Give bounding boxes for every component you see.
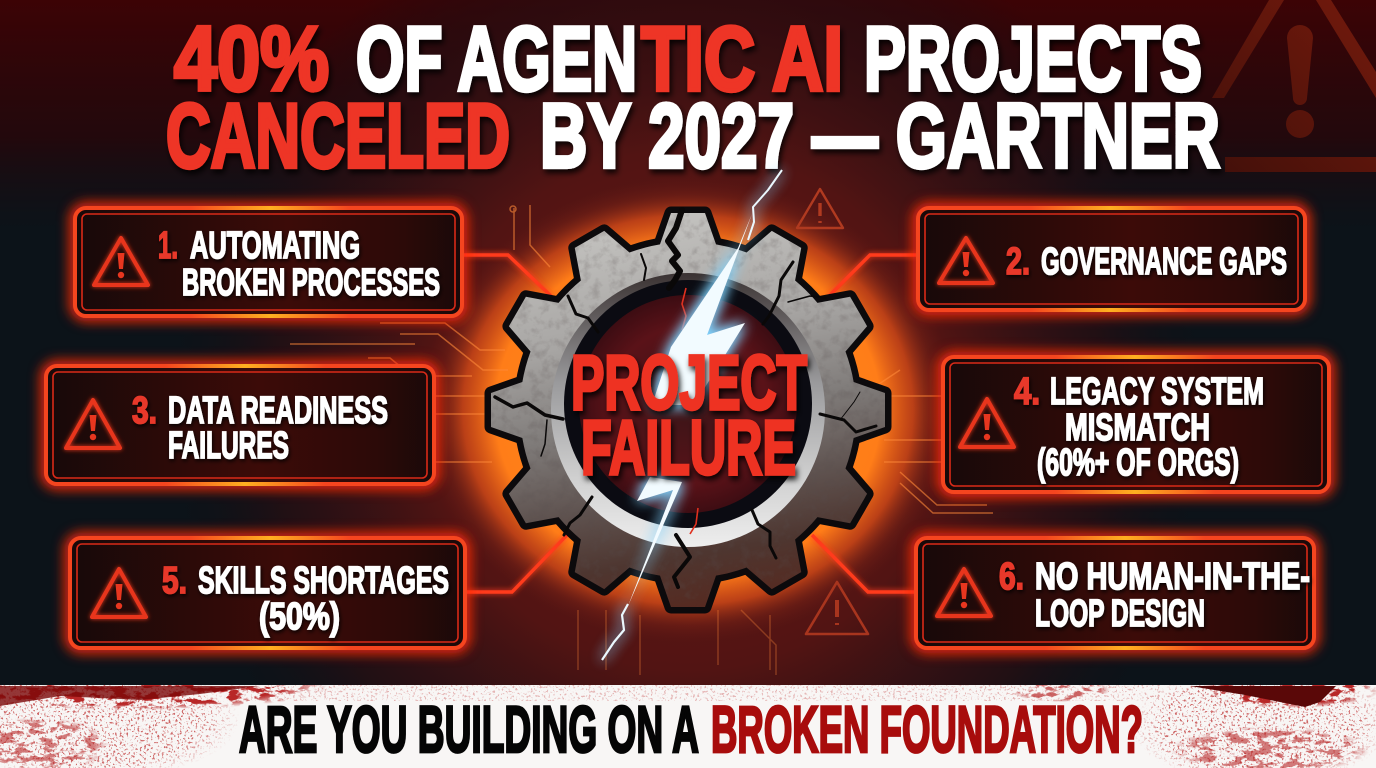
cracks [495, 210, 876, 587]
gear metal body [491, 213, 885, 607]
icon: warning triangle [94, 238, 148, 285]
gear: Project Failure [480, 200, 900, 620]
red hairline sparks [682, 288, 698, 534]
text block 3: DATA READINESS [168, 390, 388, 432]
panel 5: skills shortages [70, 536, 465, 650]
text block 4: LEGACY SYSTEM [1050, 371, 1264, 413]
text block 6: 6. [999, 556, 1024, 598]
text block 4: MISMATCH [1065, 407, 1210, 449]
text block 2: 2. [1006, 241, 1030, 283]
icon: warning triangle [66, 400, 120, 448]
text block 3: 3. [132, 390, 157, 432]
gear inner ring [551, 273, 825, 547]
gear black outline [491, 213, 885, 607]
text block 5: (50%) [259, 596, 340, 638]
text block 1: AUTOMATING [190, 225, 360, 267]
gear dark inner band [564, 280, 812, 528]
text block 2 [1006, 241, 1287, 283]
text block 4: 4. [1014, 371, 1040, 413]
text block 3: FAILURES [168, 425, 289, 467]
connector: card 2 to gear [828, 255, 917, 297]
connector: card 1 to gear [463, 255, 552, 297]
connector: card 6 to gear [812, 535, 915, 592]
text block 6 [999, 556, 1310, 635]
small warning triangle above gear [797, 189, 843, 228]
text block 4: (60%+ OF ORGS) [1037, 442, 1239, 484]
title: CANCELED [166, 86, 510, 187]
small warning triangle below gear [806, 582, 868, 634]
panel 6: no human in the loop design [916, 536, 1314, 650]
text block 5: 5. [162, 560, 187, 602]
title: 40% [174, 9, 329, 110]
title [166, 9, 1220, 187]
text block 3 [132, 390, 388, 467]
icon: warning triangle [960, 399, 1014, 447]
panel 3: data readiness failures [46, 364, 434, 486]
connector: card 4 to gear [889, 418, 943, 422]
icon: warning triangle [92, 569, 146, 617]
gear label: PROJECT FAILURE [571, 340, 807, 491]
icon: warning triangle [937, 569, 991, 616]
title: PROJECTS [864, 9, 1202, 110]
gear label: PROJECT FAILURE: PROJECT [571, 340, 807, 426]
warning triangle watermark top right [1212, 0, 1376, 172]
lightning bolt [602, 170, 782, 660]
panel 2: governance gaps [918, 206, 1305, 312]
banner question: ARE YOU BUILDING ON A [239, 692, 699, 766]
text block 5 [162, 560, 449, 638]
connector: card 3 to gear [434, 418, 490, 422]
icon: warning triangle [939, 238, 993, 283]
text block 6: LOOP DESIGN [1035, 593, 1205, 635]
text block 4 [1014, 371, 1264, 484]
text block 1 [158, 225, 440, 304]
panel 4: legacy system mismatch [943, 355, 1329, 494]
text block 1: BROKEN PROCESSES [182, 262, 440, 304]
panel 1: automating broken processes [75, 206, 462, 318]
connector: card 5 to gear [465, 535, 567, 592]
circuit traces [290, 205, 993, 675]
bottom banner [0, 685, 1376, 768]
title: OF AGEN [356, 9, 637, 110]
gear core [579, 295, 797, 513]
title: TIC AI [641, 9, 843, 110]
gear label: PROJECT FAILURE: FAILURE [581, 405, 796, 491]
text block 1: 1. [158, 225, 178, 267]
text block 5: SKILLS SHORTAGES [198, 560, 449, 602]
